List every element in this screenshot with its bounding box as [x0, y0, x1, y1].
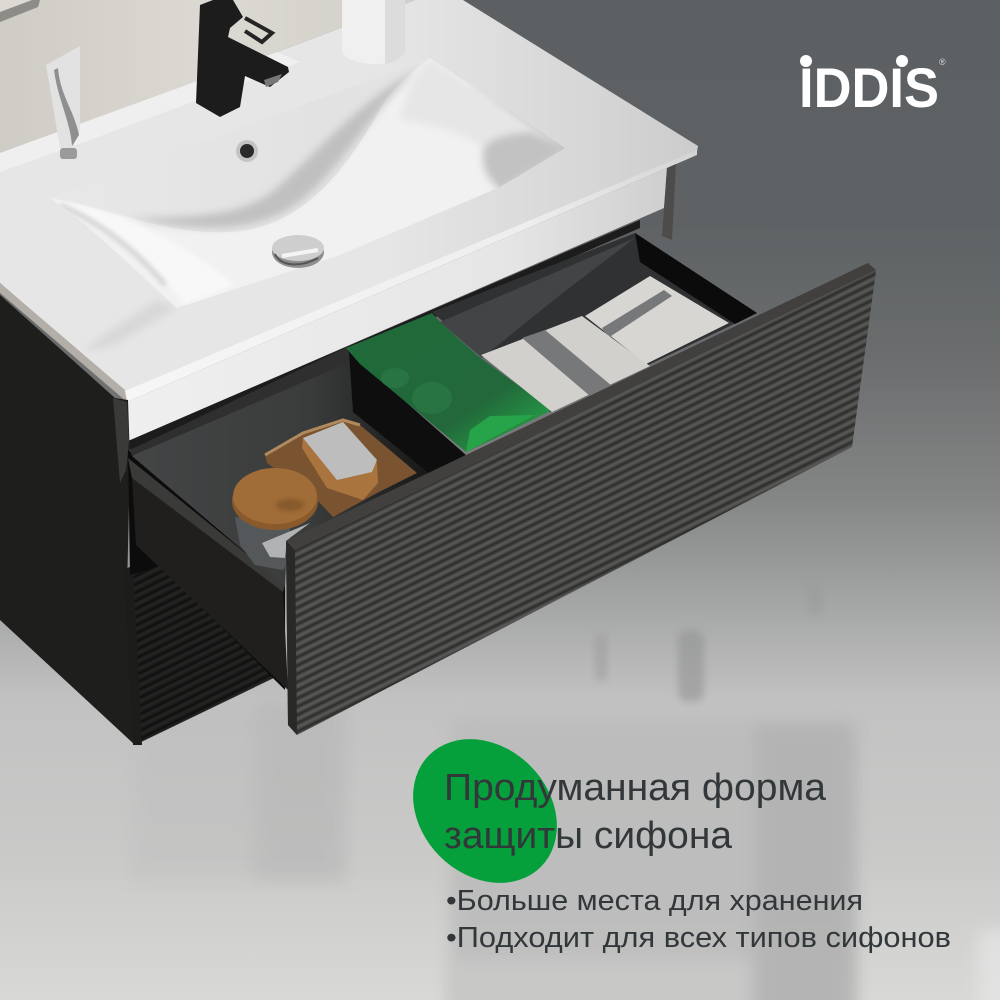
- bowl: [52, 58, 565, 308]
- heading: Продуманная форма: [444, 767, 827, 809]
- hairbrush: [302, 422, 378, 500]
- wooden lid: [232, 468, 318, 530]
- front lip: [0, 283, 127, 402]
- soap dispenser: [342, 0, 405, 64]
- washbasin: [0, 0, 698, 450]
- side wall: [132, 477, 288, 690]
- logo: IDDIS: IDDIS: [799, 56, 939, 119]
- cosmetic tube: [46, 46, 80, 159]
- left soft recess: [83, 300, 177, 352]
- bullet list: •Больше места для хранения: [446, 885, 863, 917]
- glass shelf: [0, 0, 40, 22]
- logo: IDDIS: ®: [939, 57, 946, 67]
- left compartment floor: [132, 362, 430, 586]
- open drawer: [128, 233, 876, 735]
- cabinet body: [0, 164, 676, 745]
- faucet: [196, 0, 289, 117]
- front towel: [481, 316, 650, 412]
- folded towels: [481, 276, 729, 412]
- wall behind the washbasin: [0, 0, 415, 155]
- green siphon guard: [346, 313, 552, 452]
- right post: [662, 164, 676, 240]
- apron: [127, 168, 667, 441]
- dark cavity under the drawer: [128, 450, 285, 690]
- drain: [272, 235, 324, 268]
- overflow: [236, 140, 258, 162]
- ribbed drawer front: [286, 263, 876, 735]
- lower drawer front: [124, 560, 280, 745]
- glass jar: [235, 517, 310, 570]
- heading: защиты сифона: [444, 815, 733, 857]
- rear towel: [585, 276, 729, 364]
- wooden tray: [265, 420, 417, 517]
- bullet list: •Подходит для всех типов сифонов: [446, 922, 951, 954]
- green blob: [384, 710, 586, 912]
- right compartment: [432, 233, 757, 412]
- raised rear rim: [0, 52, 300, 172]
- rear band: [130, 347, 352, 456]
- divider: [349, 352, 466, 474]
- countertop surface: [0, 0, 698, 392]
